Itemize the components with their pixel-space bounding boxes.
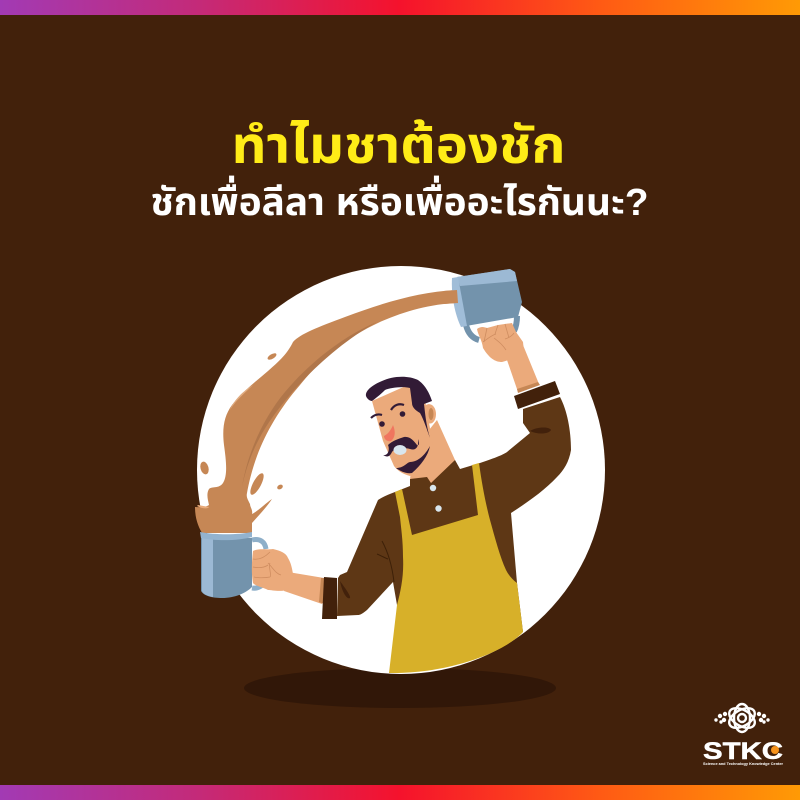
- left forearm shade: [319, 578, 326, 604]
- ear: [425, 404, 436, 424]
- right arm: [507, 345, 539, 392]
- white circle backdrop: [197, 266, 605, 674]
- atom emblem: [726, 704, 758, 732]
- whistle: [394, 445, 406, 455]
- logo: STKC: [703, 704, 783, 766]
- shirt: [337, 397, 571, 640]
- left cuff: [322, 577, 337, 619]
- brows: [371, 404, 404, 418]
- nose: [384, 425, 395, 441]
- logo orange dot: [771, 746, 779, 754]
- sleeve fold right: [530, 427, 551, 434]
- splash highlight: [197, 505, 209, 508]
- right cup: [452, 269, 522, 340]
- emblem dots: [714, 712, 770, 724]
- buttons: [430, 485, 442, 512]
- neck: [410, 420, 455, 483]
- illustration: man pouring tea: [195, 269, 571, 673]
- face: [372, 385, 433, 476]
- hair: [366, 377, 432, 438]
- stream shadow: [242, 322, 377, 487]
- moustache: [383, 437, 419, 456]
- title: ทำไมชาต้องชัก: [232, 117, 566, 175]
- inner ear: [428, 408, 434, 420]
- stream highlight: [230, 385, 253, 410]
- sleeve fold left: [340, 581, 350, 598]
- tea stream: [195, 290, 458, 533]
- subtitle: ชักเพื่อลีลา หรือเพื่ออะไรกันนะ?: [150, 175, 648, 224]
- sleeve creases: [377, 541, 394, 582]
- head: [366, 377, 436, 476]
- ground shadow: [244, 668, 556, 708]
- droplets: [199, 352, 284, 496]
- eyes: [379, 421, 385, 427]
- right cuff: [514, 381, 560, 409]
- tea stream mouth: [444, 290, 458, 304]
- left arm: [284, 572, 324, 604]
- eye right: [400, 411, 405, 417]
- left fist: [252, 549, 293, 591]
- left cup: [200, 532, 266, 598]
- logo tagline: Science and Technology Knowledge Center: [703, 761, 783, 766]
- right forearm shade: [517, 382, 540, 393]
- apron: [389, 463, 523, 673]
- top gradient bar: [0, 0, 800, 15]
- beard: [396, 446, 430, 473]
- right fist: [477, 323, 524, 362]
- logo wordmark: STKC: [703, 738, 783, 765]
- bottom gradient bar: [0, 785, 800, 800]
